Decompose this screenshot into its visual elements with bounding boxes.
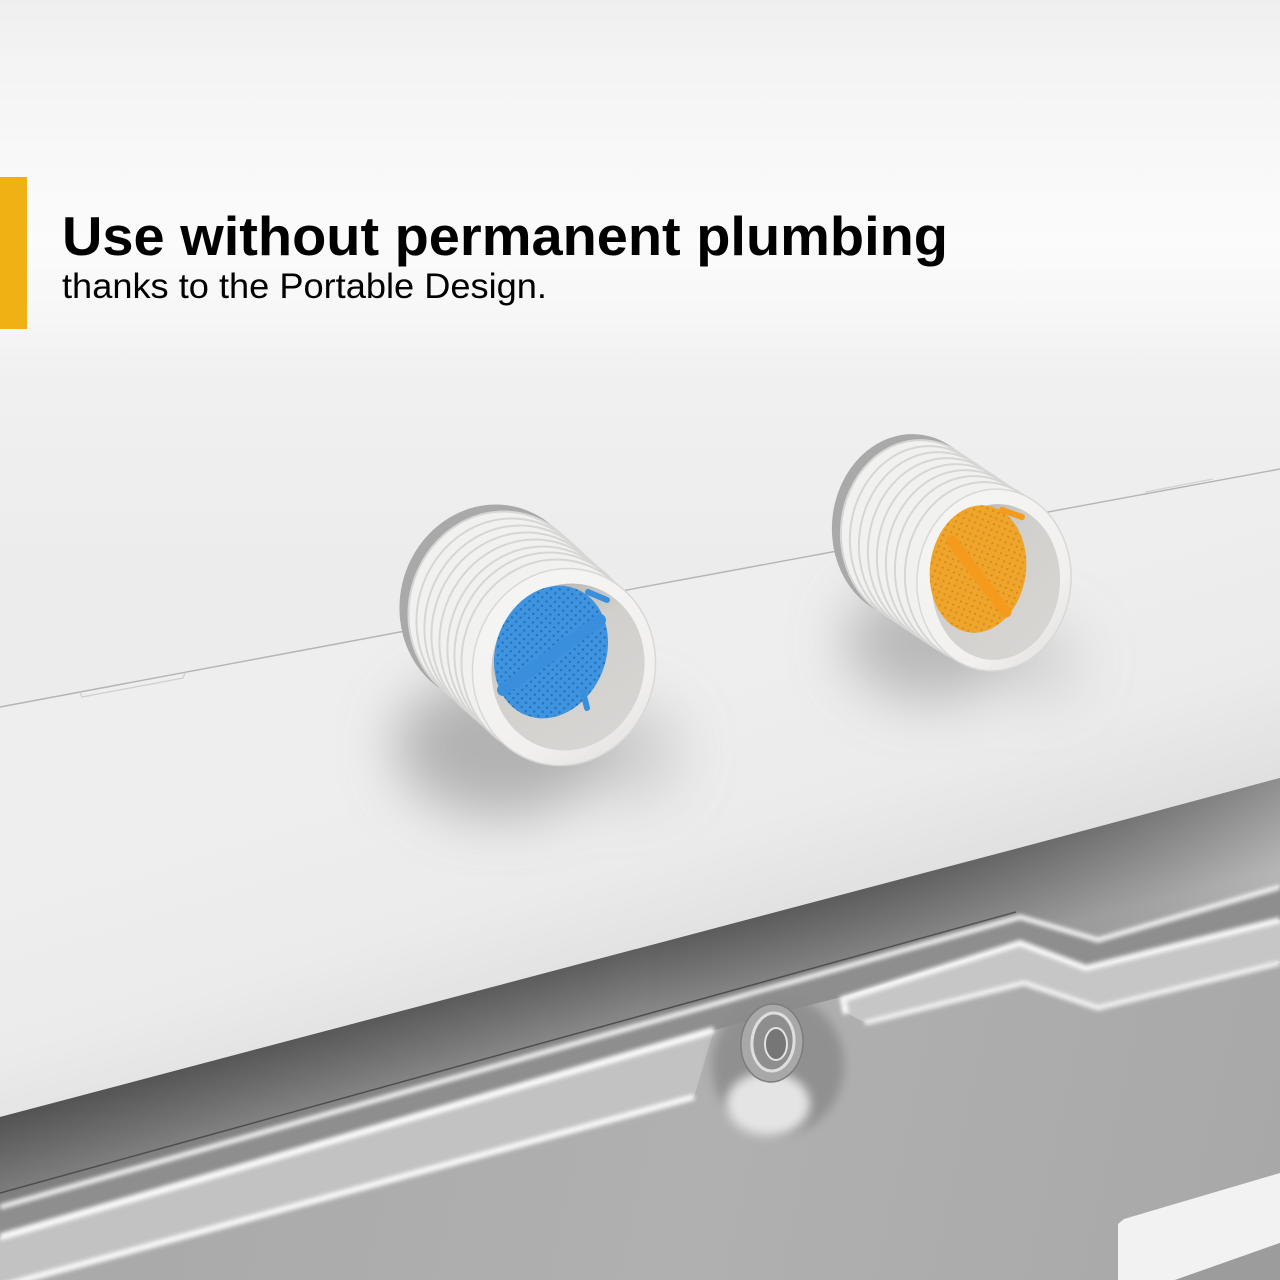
galvanized metal back plate [0, 778, 1280, 1280]
left plug shadow [395, 675, 680, 815]
thin groove line [0, 912, 1016, 1193]
right plug shadow [845, 580, 1080, 700]
blue filter screen [475, 568, 627, 736]
left inlet plug (cold, blue) [377, 484, 678, 786]
front ring [450, 548, 678, 786]
right inlet plug (hot, orange) [824, 428, 1079, 677]
heading: Use without permanent plumbing [62, 206, 948, 267]
left raised pad [0, 1030, 714, 1280]
threaded ribs [833, 434, 1067, 670]
accent bar [0, 177, 27, 329]
grey back flange [377, 484, 607, 724]
inner bore [473, 566, 663, 768]
blue filter tabs and bar [503, 592, 607, 708]
threaded ribs [386, 491, 667, 777]
orange filter bar and tab [952, 510, 1022, 612]
front ring [909, 483, 1079, 677]
seam line between upper and lower cover [0, 469, 1280, 707]
subheading: thanks to the Portable Design. [62, 267, 547, 306]
orange filter screen [922, 499, 1034, 639]
second band below upper ridge [0, 887, 1280, 1237]
dimple around screw [712, 995, 844, 1135]
screw [738, 1001, 806, 1085]
grey back flange [824, 428, 996, 624]
white cut-out bottom right [1118, 1173, 1280, 1280]
dark recessed band [0, 778, 1280, 1207]
upper bright ridge [0, 887, 1280, 1207]
right raised pad [842, 920, 1280, 1023]
inner bore [925, 499, 1067, 665]
